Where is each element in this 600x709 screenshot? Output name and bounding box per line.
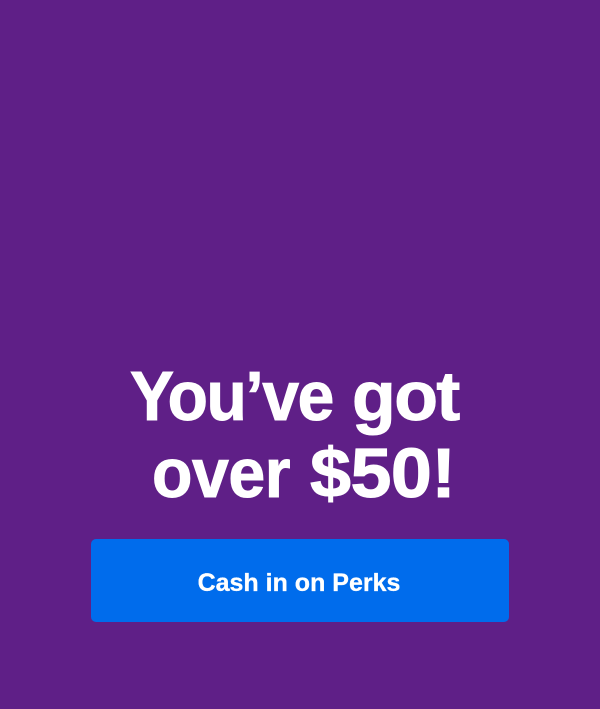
button label: Cash in on Perks: [198, 569, 400, 597]
headline line 2: over: [152, 434, 290, 512]
headline line 1: [130, 357, 460, 436]
headline line 1: You’ve: [130, 357, 333, 435]
headline line 2: $50!: [310, 434, 455, 512]
button: cash in on perks: [91, 539, 509, 622]
headline line 1: got: [352, 357, 459, 435]
headline line 2: [152, 434, 455, 512]
headline: [130, 357, 460, 512]
